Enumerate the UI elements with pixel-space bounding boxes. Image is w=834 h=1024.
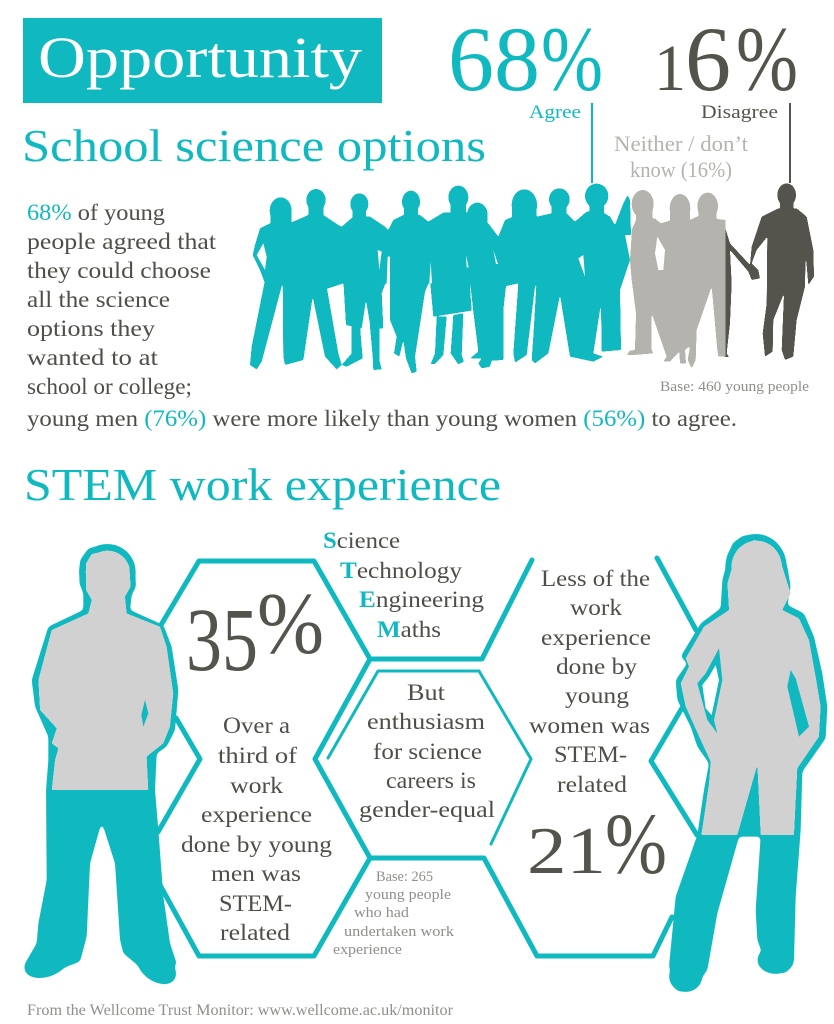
heading: STEM work experience: STEM work experience [24, 459, 501, 510]
text block: young women: STEM- [554, 742, 627, 768]
text block: young men [181, 713, 332, 946]
note: base 265 young people: Base: 265 [376, 869, 433, 885]
text block: young men: men was [211, 861, 301, 887]
text block: young women: work [570, 595, 622, 621]
stat: neither / don't know: Neither / don’t [614, 131, 748, 156]
stat: 16% disagree: % [736, 8, 798, 110]
text block: school science finding: they could choose [27, 258, 211, 283]
stat: 68% agree: 68 [448, 8, 540, 110]
text block: STEM acronym: Engineering [359, 587, 484, 613]
stat: 21%: % [605, 795, 667, 892]
title: Opportunity [23, 18, 382, 103]
heads and necks [270, 197, 292, 224]
text block: school science finding: young men (76%) were more likely than young women (56%) to agree. [27, 406, 737, 431]
chart: crowd of silhouettes [250, 183, 814, 373]
stat: 16% disagree [654, 8, 798, 183]
text block: STEM acronym [323, 528, 484, 643]
figure: young man silhouette [20, 544, 182, 991]
text block: STEM acronym: Technology [340, 558, 462, 584]
text block: enthusiasm is gender-equal [359, 680, 496, 823]
stat: 35%: 35 [186, 591, 258, 690]
stat: 68% agree: % [541, 8, 603, 110]
text block: school science finding [27, 200, 737, 431]
text block: STEM acronym: Maths [377, 617, 441, 643]
silhouettes: grey gap [655, 237, 665, 270]
footer: source: From the Wellcome Trust Monitor: www.wellcome.ac.uk/monitor [27, 1002, 454, 1019]
legs [250, 280, 283, 369]
hexagon network [158, 558, 697, 956]
text block: young men: third of [218, 743, 297, 769]
text block: enthusiasm is gender-equal: for science [373, 739, 482, 765]
text block: young women: related [557, 772, 627, 798]
text block: young women: done by [556, 654, 637, 680]
stat: neither / don't know: know (16%) [630, 157, 732, 182]
note: base 265 young people [333, 869, 455, 958]
silhouettes: neither group [627, 190, 726, 368]
text block: young women: Less of the [541, 566, 650, 592]
text block: enthusiasm is gender-equal: careers is [386, 768, 476, 794]
text block: STEM acronym: Science [323, 528, 400, 554]
text block: school science finding: school or college; [27, 374, 192, 399]
text block: young men: Over a [223, 713, 291, 739]
figure: young woman silhouette [669, 534, 827, 992]
text block: school science finding: 68% of young [27, 200, 166, 225]
stat: 68% agree: Agree [529, 102, 581, 123]
text block: school science finding: all the science [27, 287, 170, 312]
text block: school science finding: options they [27, 316, 156, 341]
note: base 265 young people: who had [354, 905, 410, 921]
text block: young men: related [220, 920, 290, 946]
torso mass [253, 195, 631, 290]
stat: 21%: 21 [527, 814, 606, 888]
text block: enthusiasm is gender-equal: But [407, 680, 446, 706]
stat: 16% disagree: 1 [654, 32, 686, 105]
text block: young women: young [565, 683, 629, 709]
note: base 460 young people: Base: 460 young people [660, 379, 809, 395]
text block: school science finding: wanted to at [27, 345, 159, 370]
silhouettes: agree group [250, 184, 631, 373]
text block: enthusiasm is gender-equal: enthusiasm [367, 709, 485, 735]
text block: young women [529, 566, 651, 798]
stat: neither / don't know [614, 131, 748, 182]
stat: 16% disagree: 6 [685, 8, 731, 110]
text block: young men: experience [201, 802, 312, 828]
title: Opportunity: Opportunity [38, 25, 362, 90]
silhouettes: disagree group [723, 183, 814, 360]
text block: enthusiasm is gender-equal: gender-equal [359, 797, 496, 823]
note: base 265 young people: young people [365, 887, 451, 903]
text block: school science finding: people agreed that [27, 229, 217, 254]
text block: young men: work [230, 773, 283, 799]
text block: young men: STEM- [219, 891, 292, 917]
stat: 68% agree [448, 8, 603, 183]
stat: 35%: % [257, 576, 324, 673]
text block: young men: done by young [181, 832, 332, 858]
note: base 265 young people: undertaken work [344, 924, 455, 940]
silhouettes: gaps [257, 243, 585, 283]
heading: school science options: School science options [22, 120, 486, 171]
stat: 16% disagree: Disagree [701, 102, 778, 123]
text block: young women: women was [529, 713, 650, 739]
note: base 265 young people: experience [333, 942, 402, 958]
text block: young women: experience [541, 625, 651, 651]
